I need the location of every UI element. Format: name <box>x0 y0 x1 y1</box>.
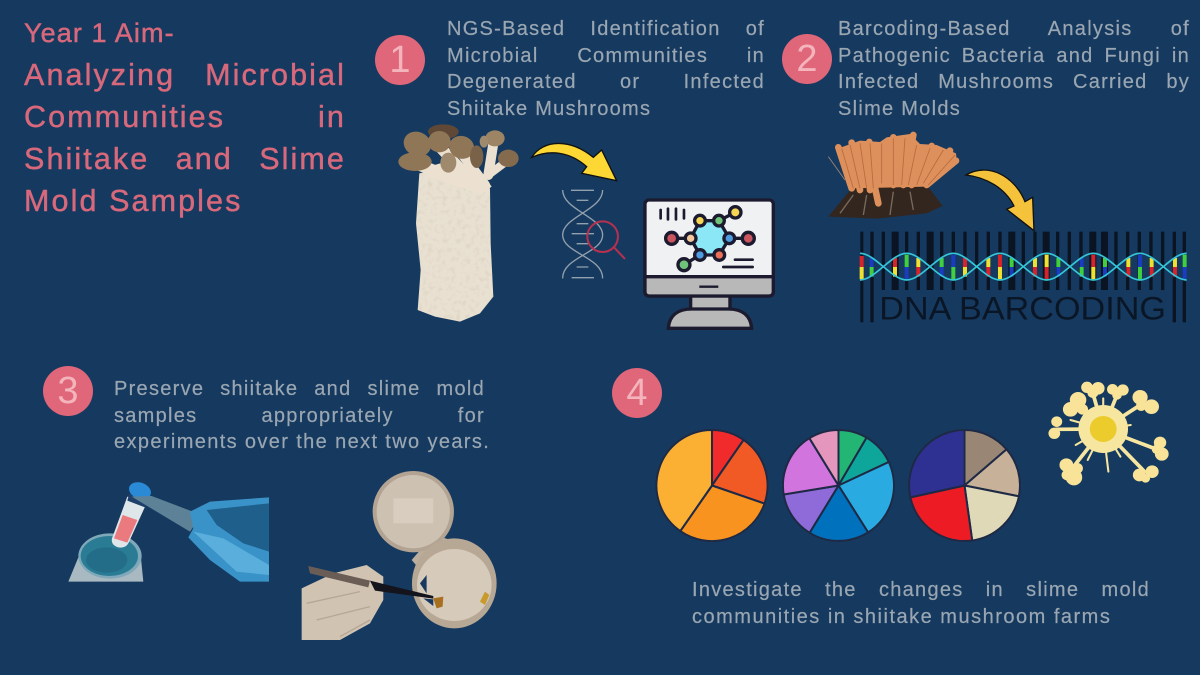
barcode label: DNA BARCODING <box>879 290 1166 326</box>
icon: shiitake mushroom grow bag <box>398 124 519 322</box>
title: Shiitake and Slime <box>24 142 346 176</box>
text: step 3 description: Preserve shiitake and slime mold <box>114 378 485 400</box>
text: step 2 description: Infected Mushrooms Carried by <box>838 71 1190 93</box>
title: Year 1 Aim- <box>24 18 175 48</box>
step number 3: 3 <box>57 370 79 412</box>
text: step 3 description: experiments over the next two years. <box>114 431 490 453</box>
text: step 1 description: Shiitake Mushrooms <box>447 98 651 120</box>
title: Mold Samples <box>24 184 242 218</box>
pie chart 3 <box>909 430 1020 541</box>
text: step 1 description: NGS-Based Identification of <box>447 18 765 40</box>
text: step 4 description <box>692 579 1150 628</box>
DNA barcode graphic <box>860 232 1187 326</box>
arrow: slime mold to barcode <box>966 170 1034 231</box>
icon: computer with molecule <box>645 200 773 328</box>
title <box>24 18 346 218</box>
photo: vial in cryo beaker with gloved hand <box>68 479 269 582</box>
text: step 1 description: Degenerated or Infected <box>447 71 765 93</box>
text: step 3 description <box>114 378 490 453</box>
photo: petri dish with tweezers and hand <box>302 471 497 640</box>
step number 1 <box>375 35 425 85</box>
icon: slime mold sample <box>828 134 957 219</box>
text: step 3 description: samples appropriately for <box>114 404 485 426</box>
arrow: mushroom to sequencing <box>532 143 617 181</box>
text: step 2 description: Pathogenic Bacteria and Fungi in <box>838 44 1190 66</box>
text: step 4 description: communities in shiitake mushroom farms <box>692 606 1111 628</box>
step number 1: 1 <box>389 39 411 81</box>
text: step 4 description: Investigate the changes in slime mold <box>692 579 1150 601</box>
text: step 2 description: Barcoding-Based Analysis of <box>838 18 1190 40</box>
title: Communities in <box>24 100 346 134</box>
title: Analyzing Microbial <box>24 58 346 92</box>
step number 4: 4 <box>626 372 648 414</box>
text: step 2 description <box>838 18 1190 120</box>
text: step 1 description <box>447 18 765 120</box>
step number 4 <box>612 368 662 418</box>
step number 2 <box>782 34 832 84</box>
text: step 1 description: Microbial Communities in <box>447 44 765 66</box>
helix rungs <box>862 255 1185 279</box>
helix strands <box>860 253 1187 280</box>
icon: yellow slime mold <box>1048 382 1169 485</box>
pie chart 1 <box>656 430 768 541</box>
step number 2: 2 <box>796 38 818 80</box>
pie chart 2 <box>783 430 894 541</box>
step number 3 <box>43 366 93 416</box>
text: step 2 description: Slime Molds <box>838 98 961 120</box>
icon: DNA with magnifier <box>563 190 625 278</box>
barcode bars <box>860 232 1186 322</box>
